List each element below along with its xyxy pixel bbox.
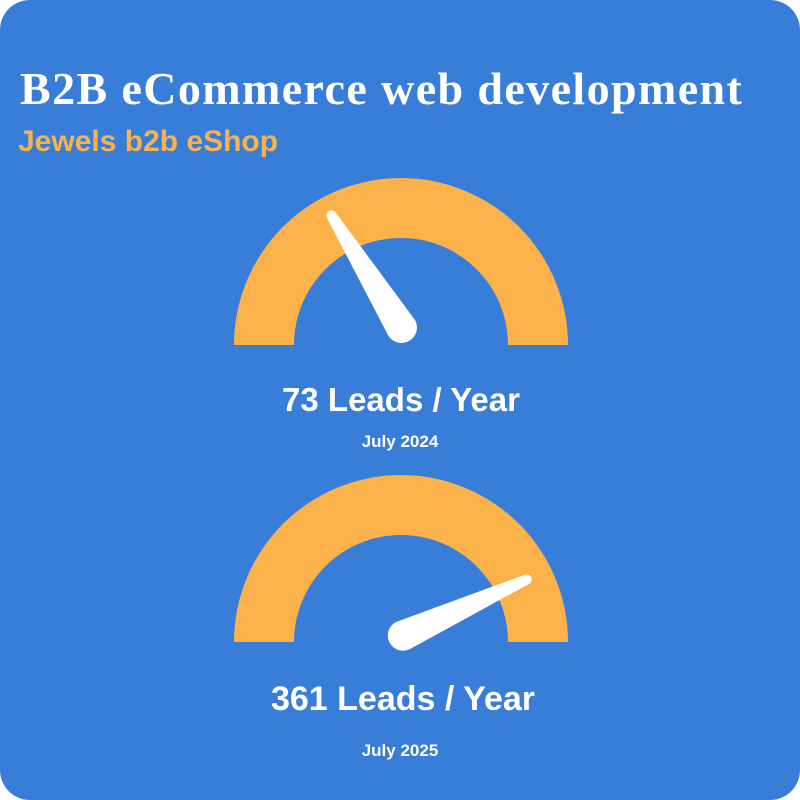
date 2: July 2025 (362, 741, 438, 760)
date 1: July 2024 (362, 432, 438, 451)
title: B2B eCommerce web development (20, 63, 743, 114)
label 1: 73 Leads / Year (282, 381, 520, 418)
needle 1 (326, 210, 417, 343)
needle 2 (388, 574, 532, 651)
subtitle: Jewels b2b eShop (18, 125, 278, 158)
label 2: 361 Leads / Year (271, 680, 535, 718)
